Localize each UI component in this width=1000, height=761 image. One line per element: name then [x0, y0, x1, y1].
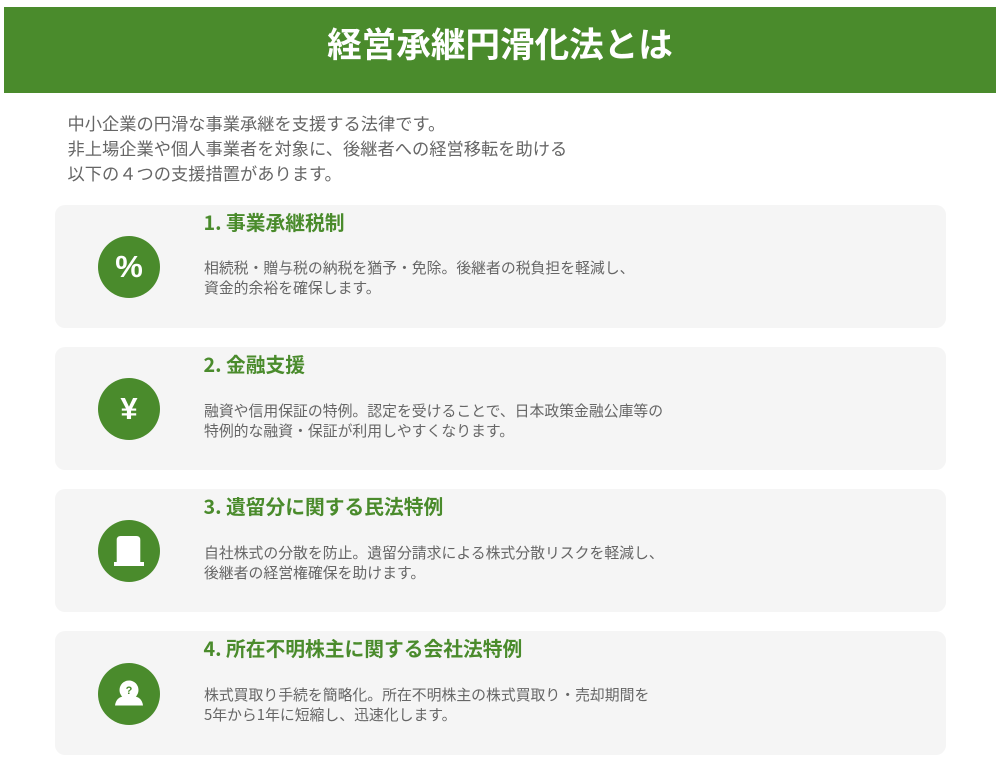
icon: unknown person: ?	[126, 685, 133, 697]
description: 4	[204, 684, 649, 724]
description: 2: 融資や信用保証の特例。認定を受けることで、日本政策金融公庫等の	[204, 400, 663, 420]
description: 4: 5年から1年に短縮し、迅速化します。	[204, 704, 456, 724]
title: 経営承継円滑化法とは	[327, 17, 673, 67]
header banner	[4, 7, 996, 93]
icon: yen	[98, 378, 160, 440]
description: 3: 後継者の経営権確保を助けます。	[204, 562, 425, 582]
intro text: 以下の４つの支援措置があります。	[68, 160, 342, 185]
description: 1: 相続税・贈与税の納税を猶予・免除。後継者の税負担を軽減し、	[204, 256, 634, 278]
panel: 事業承継税制	[55, 205, 946, 328]
panel: 遺留分に関する民法特例	[55, 489, 946, 612]
heading: 1: 1. 事業承継税制	[204, 207, 345, 236]
description: 1: 資金的余裕を確保します。	[204, 276, 381, 298]
icon: percent	[98, 236, 160, 298]
intro text: 中小企業の円滑な事業承継を支援する法律です。	[68, 110, 445, 135]
description: 3: 自社株式の分散を防止。遺留分請求による株式分散リスクを軽減し、	[204, 542, 664, 562]
description: 2	[204, 400, 663, 440]
description: 1	[204, 256, 634, 298]
icon: document block	[98, 520, 160, 582]
description: 2: 特例的な融資・保証が利用しやすくなります。	[204, 420, 514, 440]
icon: yen: ¥	[120, 391, 138, 426]
description: 4: 株式買取り手続を簡略化。所在不明株主の株式買取り・売却期間を	[204, 684, 649, 704]
icon: unknown person	[98, 663, 160, 725]
panel: 所在不明株主に関する会社法特例	[55, 631, 946, 755]
panel: 金融支援	[55, 347, 946, 470]
intro text: 非上場企業や個人事業者を対象に、後継者への経営移転を助ける	[68, 135, 567, 160]
description: 3	[204, 542, 664, 582]
heading: 4: 4. 所在不明株主に関する会社法特例	[204, 633, 522, 662]
intro text	[68, 110, 567, 185]
icon: percent: %	[115, 249, 143, 284]
heading: 3: 3. 遺留分に関する民法特例	[204, 491, 443, 520]
heading: 2: 2. 金融支援	[204, 349, 305, 378]
